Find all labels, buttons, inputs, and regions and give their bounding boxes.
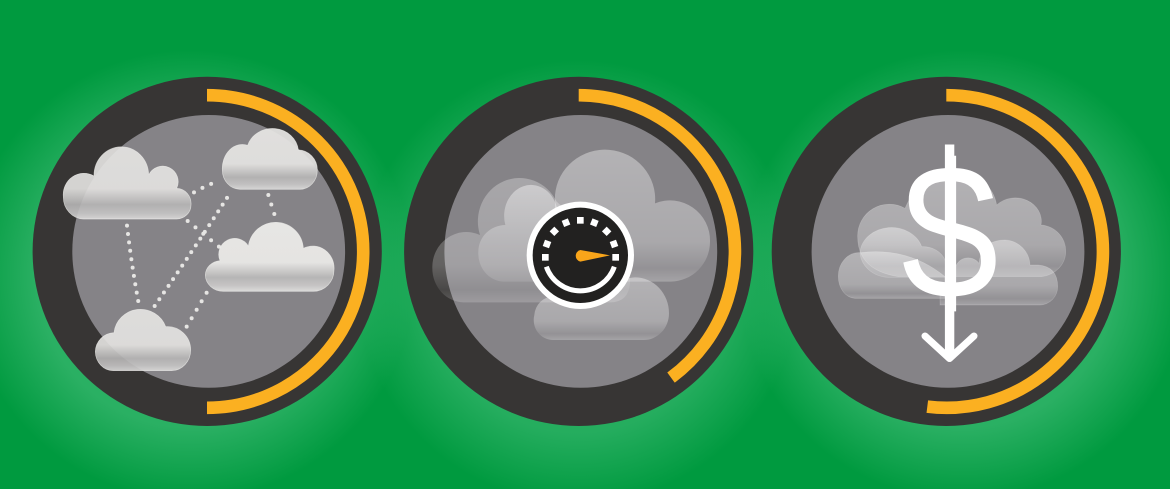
progress arc: right badge <box>927 95 1103 408</box>
cloud: lower right <box>940 240 1058 305</box>
cloud: upper right <box>222 129 317 189</box>
cloud cluster with dollar <box>838 172 1066 305</box>
cloud: lower left <box>838 252 945 298</box>
dollar sign: $ <box>901 124 998 339</box>
icon: dollar sign with down arrow <box>901 124 998 359</box>
cloud: bottom <box>534 277 669 340</box>
panel: multi-cloud network badge <box>33 77 382 426</box>
network of clouds <box>63 129 334 371</box>
progress arc: left badge <box>207 95 363 408</box>
cloud: front left <box>478 185 600 282</box>
progress arc: middle badge <box>579 95 735 378</box>
panel: cloud speed badge <box>404 77 753 426</box>
cloud: large back <box>555 150 710 282</box>
cloud: far left <box>432 178 630 302</box>
icon: gauge needle <box>576 250 610 262</box>
cloud: lower left <box>95 309 191 371</box>
cloud: right <box>205 222 334 291</box>
cloud: back <box>858 172 1066 277</box>
cloud: upper left <box>63 147 191 219</box>
dotted connectors <box>127 181 274 327</box>
arrow shaft and head <box>925 144 974 358</box>
panel: cost reduction badge <box>772 77 1121 426</box>
icon: speed gauge <box>527 202 634 309</box>
cloud cluster with gauge <box>432 150 710 340</box>
cloud: middle left <box>860 228 952 277</box>
